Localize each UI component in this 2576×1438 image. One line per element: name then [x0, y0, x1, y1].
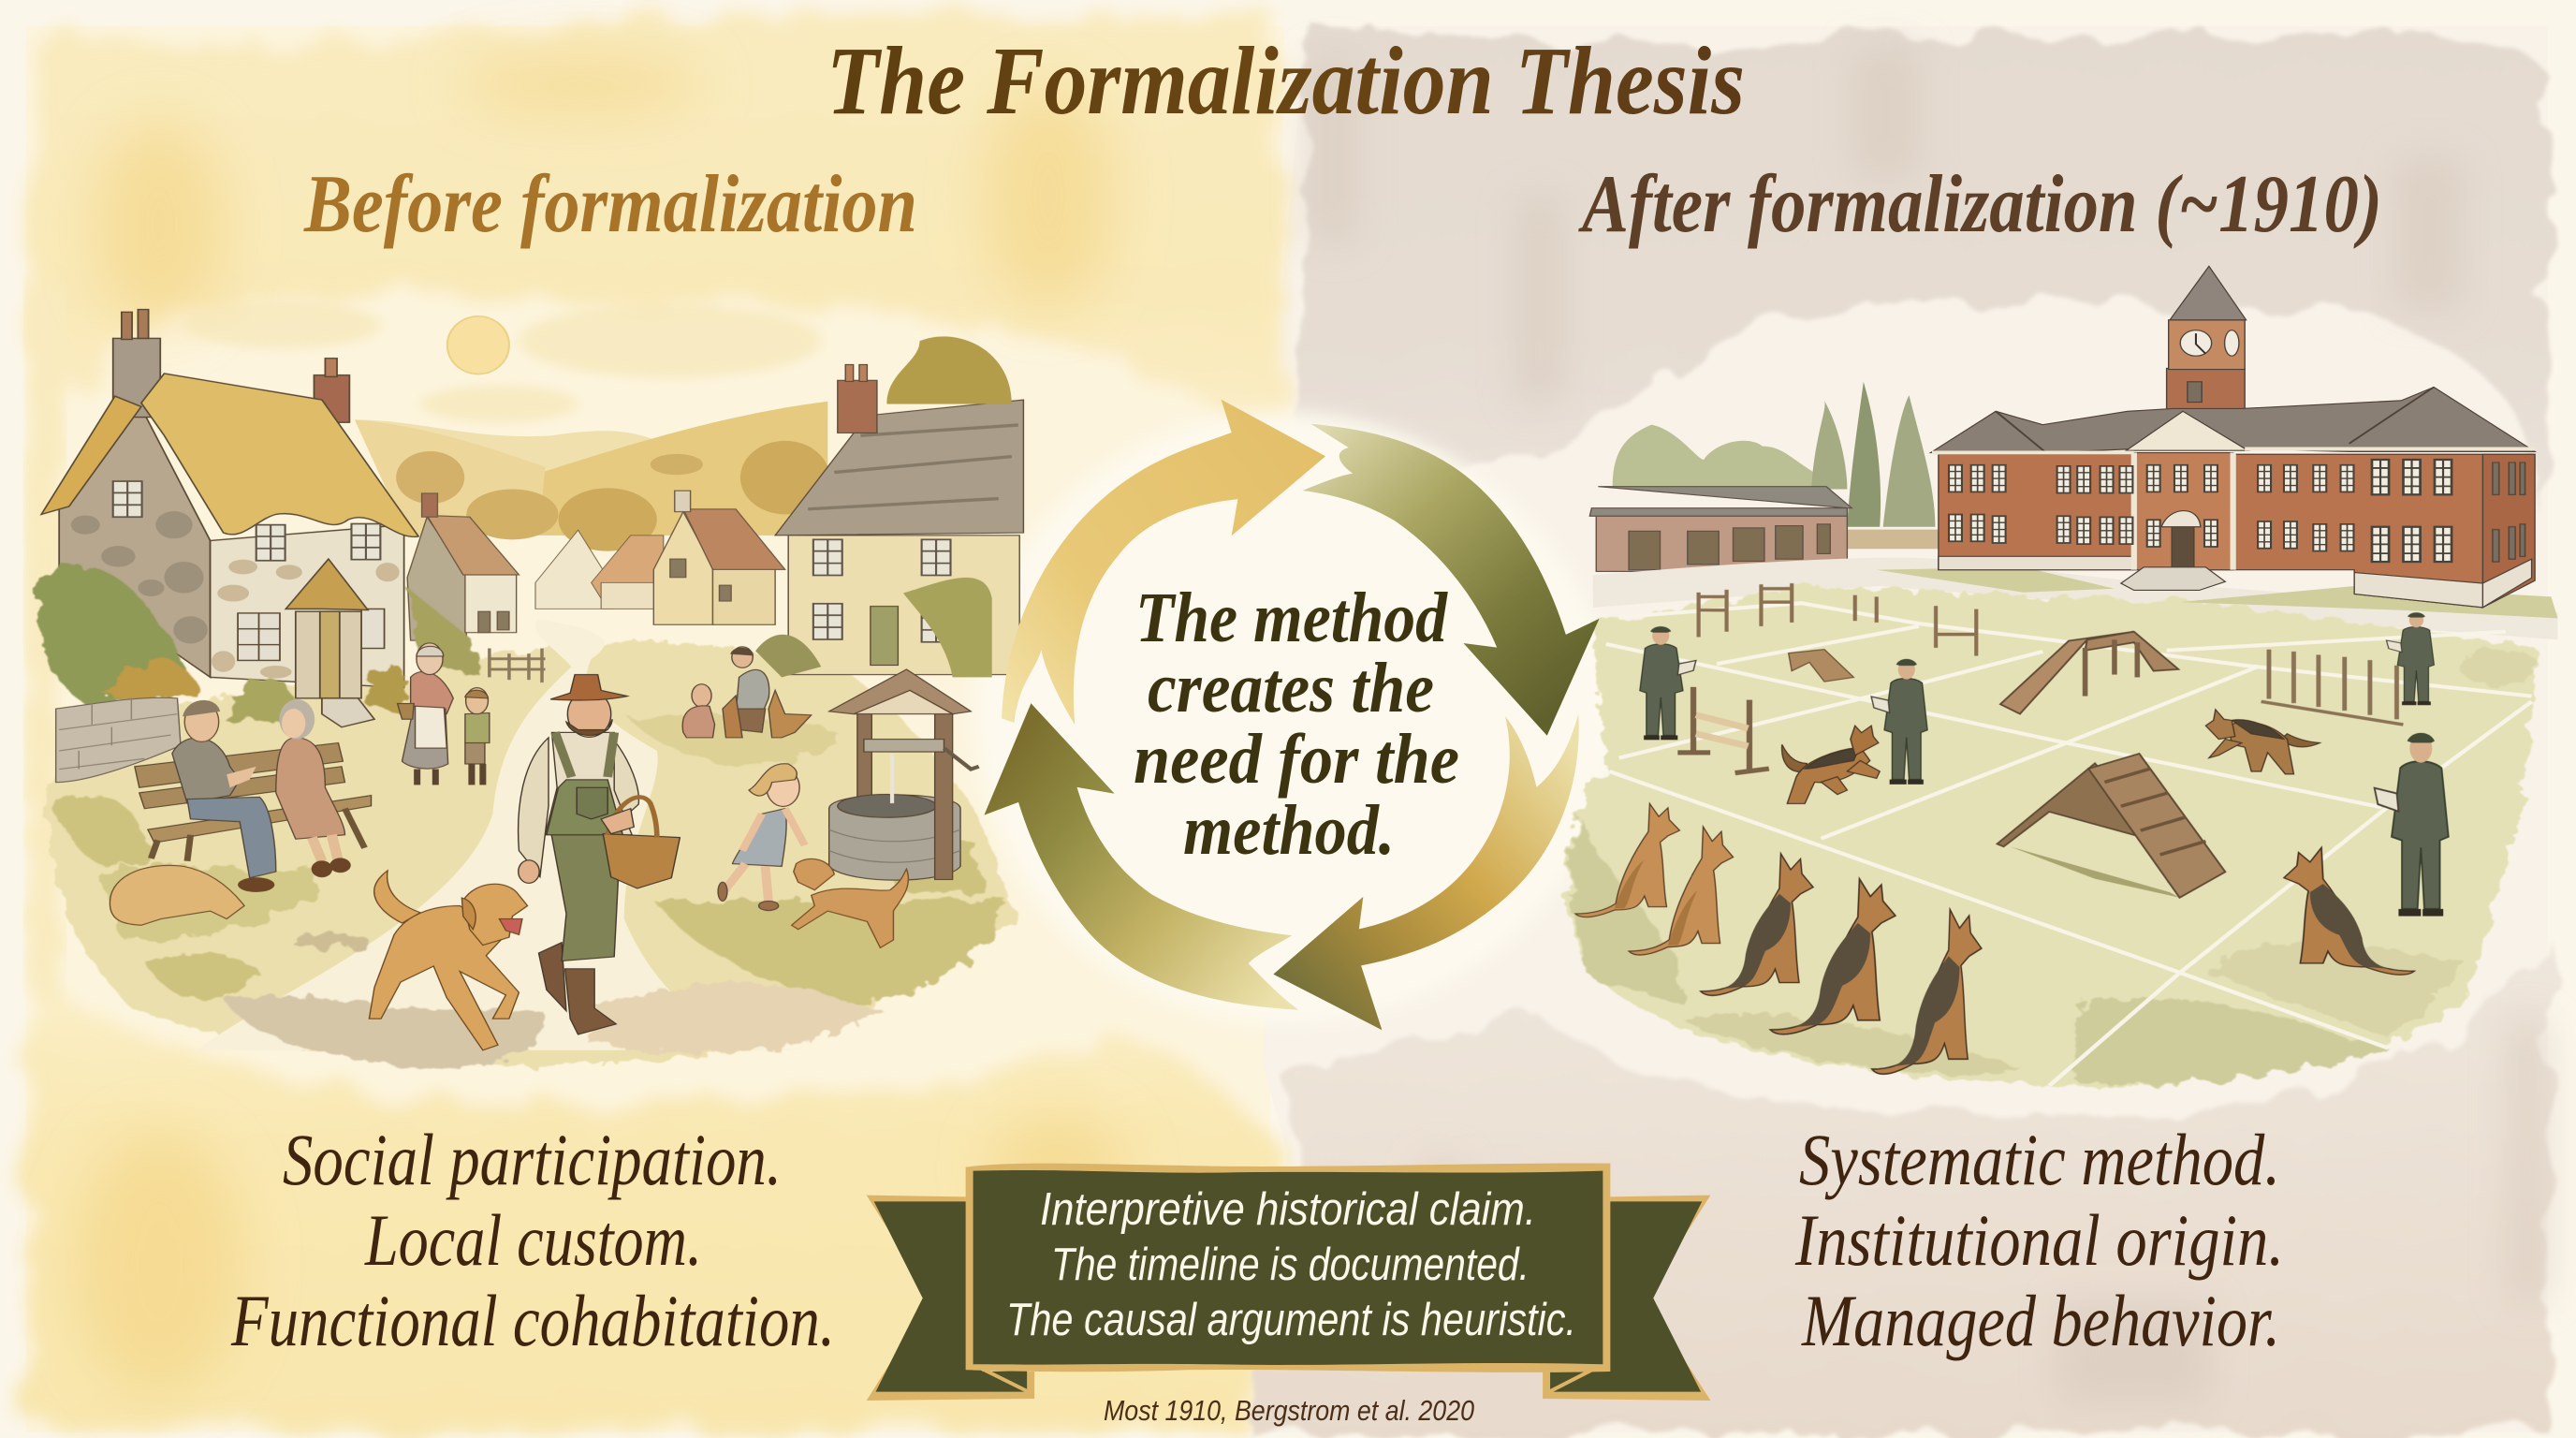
small jump ramp: [1789, 650, 1853, 682]
far hurdles: [1699, 583, 1976, 655]
running shepherd right: [2205, 710, 2320, 774]
slate-roof cottage: [775, 364, 1023, 675]
seated shepherd row: [1575, 803, 1982, 1074]
wooden fence: [1847, 530, 1939, 549]
trainer foreground: [2375, 733, 2449, 917]
trainer center: [1871, 659, 1927, 785]
left top wash: [30, 14, 1284, 487]
bushes by cottage: [37, 565, 483, 725]
right summary text: Institutional origin.: [1794, 1199, 2284, 1281]
left summary text: Local custom.: [364, 1199, 702, 1281]
muddy path patches: [224, 932, 880, 1069]
banner text: Interpretive historical claim.: [1040, 1184, 1536, 1235]
banner text: The causal argument is heuristic.: [1006, 1295, 1576, 1345]
title: The Formalization Thesis: [827, 27, 1745, 135]
farmer with basket: [519, 675, 680, 1034]
cycle center text: need for the: [1134, 720, 1459, 799]
ground edge shading: [1572, 648, 2539, 1082]
heading: after formalization: After formalization (~1910): [1578, 159, 2382, 250]
ribbon center fill: [973, 1170, 1603, 1365]
banner text: The timeline is documented.: [1051, 1240, 1530, 1290]
rolling hills: [355, 402, 829, 551]
grass patches: [52, 715, 1005, 1003]
village ground: [46, 642, 1012, 1065]
water well: [829, 669, 979, 880]
ribbon banner: [867, 1164, 1710, 1401]
weave poles: [2261, 650, 2403, 725]
a-frame obstacle: [1998, 754, 2225, 898]
running shepherd center: [1782, 726, 1880, 803]
yellow wash blooms: [75, 56, 1123, 1395]
right summary text: Managed behavior.: [1801, 1280, 2280, 1361]
citation: Most 1910, Bergstrom et al. 2020: [1104, 1394, 1474, 1427]
lawns: [1877, 567, 2557, 618]
trainer left: [1640, 626, 1696, 740]
right summary text: Systematic method.: [1799, 1119, 2280, 1200]
wooden fence: [490, 648, 545, 682]
left scene paper tint: [26, 26, 1284, 1432]
elevated ramp: [2000, 632, 2178, 713]
cycle center text: creates the: [1148, 649, 1434, 727]
left summary text: Social participation.: [283, 1119, 782, 1200]
left wash edge strip: [26, 281, 64, 992]
arrow: olive bottom-left: [984, 703, 1298, 1010]
kneeling figures with dogs: [682, 647, 812, 738]
trainer far right: [2386, 612, 2434, 705]
background trees: [1613, 382, 1935, 527]
left summary text: [230, 1119, 835, 1361]
cycle center text: method.: [1183, 791, 1395, 870]
woman and child: [398, 643, 490, 785]
sky clouds: [184, 301, 821, 422]
ribbon left tail: [867, 1196, 1034, 1401]
arrow: olive top-right: [1303, 424, 1600, 736]
right top wash: [1296, 22, 2548, 524]
school building: [1931, 266, 2535, 608]
heading: before formalization: Before formalization: [303, 159, 917, 250]
center cream disk: [973, 412, 1619, 1025]
right summary text: [1794, 1119, 2284, 1361]
thatched cottage: [41, 310, 418, 727]
village path: [198, 620, 808, 1050]
girl running: [718, 764, 805, 911]
playing puppy: [792, 858, 908, 947]
training ground: [1568, 586, 2535, 1086]
stone wall: [56, 697, 181, 783]
wash streaks: [1310, 47, 2546, 1404]
middle cottage: [407, 493, 519, 640]
ribbon right tail: [1543, 1196, 1710, 1401]
small back cottages: [535, 530, 664, 609]
seated shepherd right: [2284, 847, 2414, 975]
ground lane lines: [1606, 603, 2532, 1086]
ribbon center panel: [966, 1164, 1610, 1372]
bushes by slate cottage: [755, 578, 992, 677]
golden retriever: [369, 871, 528, 1050]
cycle arrows: [984, 400, 1600, 1030]
right scene paper tint: [1254, 26, 2548, 1432]
seated couple on bench: [135, 699, 372, 892]
back cottage: [653, 491, 785, 624]
barn: [1589, 487, 1852, 571]
banner text: [1006, 1184, 1576, 1345]
right bottom wash: [1250, 936, 2548, 1432]
cycle center text: [1134, 579, 1459, 870]
left summary text: Functional cohabitation.: [230, 1280, 835, 1361]
left bottom wash: [26, 974, 1288, 1431]
arrow: gold-olive bottom-right: [1273, 714, 1579, 1030]
sun: [447, 316, 509, 374]
near hurdle: [1677, 687, 1769, 773]
cycle center text: The method: [1135, 579, 1448, 657]
illustration: village scene: [37, 301, 1023, 1069]
plaza: [1593, 558, 2557, 639]
resting dog: [110, 865, 244, 925]
tree behind slate cottage: [886, 336, 1012, 404]
illustration: training ground scene: [1568, 266, 2557, 1086]
arrow: gold top-left: [1002, 400, 1325, 725]
